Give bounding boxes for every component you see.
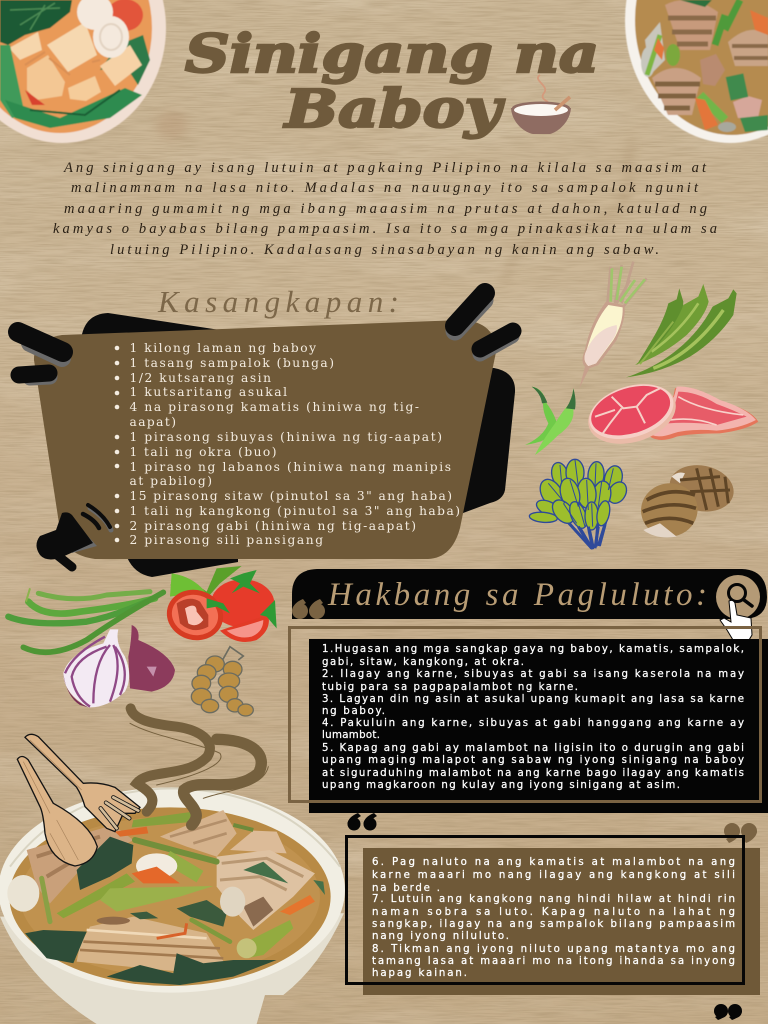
ingredient list: 2 pirasong gabi (hiniwa ng tig-aapat) (130, 519, 416, 533)
panel: ingredients (34, 313, 515, 577)
icon: opening quote brown (292, 599, 325, 619)
icon: kangkong leaves (529, 459, 630, 549)
icon: opening quote black (348, 813, 377, 830)
ingredient list: 1 tali ng okra (buo) (130, 445, 276, 459)
icon: chili peppers (525, 387, 576, 455)
intro paragraph (53, 160, 717, 258)
panel: steps 6 to 8: 7. Lutuin ang kangkong nang hindi hilaw at hindi rin (372, 894, 735, 905)
panel: steps 6 to 8: na berde . (372, 883, 440, 894)
panel: steps 6 to 8: karne maaari mo nang ilagay ang kangkong at sili (372, 870, 735, 881)
panel: steps 6 to 8: 6. Pag naluto na ang kamatis at malambot na ang (372, 857, 735, 868)
title: Baboy (283, 79, 506, 140)
ingredient list: 1 kilong laman ng baboy (130, 341, 316, 355)
ingredient list: 1/2 kutsarang asin (130, 371, 271, 385)
icon: closing quote brown (724, 823, 757, 843)
ingredient list: 1 piraso ng labanos (hiniwa nang manipis (130, 460, 451, 474)
panel: steps 6 to 8: naman sobra sa luto. Kapag naluto na lahat ng (372, 907, 735, 918)
panel: steps 1 to 5: gabi, sitaw, kangkong, at okra. (322, 657, 524, 668)
heading bar: Hakbang sa Pagluluto (292, 569, 767, 619)
intro paragraph: maaaring gumamit ng mga ibang maaasim na prutas at dahon, katulad ng (64, 201, 707, 217)
panel: steps 1 to 5: 5. Kapag ang gabi ay malambot na ligisin ito o durugin ang gabi (322, 743, 744, 754)
icon: gabi taro (637, 459, 738, 541)
pork belly pieces (27, 810, 315, 972)
ingredient list: 4 na pirasong kamatis (hiniwa ng tig- (130, 400, 419, 414)
icon: wooden fork and spoon (17, 734, 140, 866)
panel: steps 1 to 5: 3. Lagyan din ng asin at asukal upang kumapit ang lasa sa karne (322, 694, 744, 705)
kangkong and vegetables (7, 812, 325, 985)
panel: steps 1 to 5 (290, 628, 768, 813)
title (185, 24, 599, 140)
panel: steps 6 to 8: 8. Tikman ang iyong niluto upang matantya mo ang (372, 944, 735, 955)
ingredient list: 1 tasang sampalok (bunga) (130, 356, 334, 370)
ingredient list: 15 pirasong sitaw (pinutol sa 3" ang haba) (130, 489, 452, 503)
icon: closing quote black (714, 1004, 742, 1020)
heading bar: Hakbang sa Pagluluto: Hakbang sa Pagluluto: (327, 577, 707, 613)
panel: steps 1 to 5: at siguraduhing malambot na ang karne bago ilagay ang kamatis (322, 768, 744, 779)
intro paragraph: malinamnam na lasa nito. Madalas na nauugnay ito sa sampalok ngunit (71, 180, 699, 196)
icon: tape strips (18, 293, 513, 378)
ingredient list: 1 pirasong sibuyas (hiniwa ng tig-aapat) (130, 430, 442, 444)
intro paragraph: lutuing Pilipino. Kadalasang sinasabayan ng kanin ang sabaw. (110, 242, 659, 258)
ingredient list: at pabilog) (130, 474, 212, 488)
plate: top right sinigang (625, 0, 768, 143)
panel: steps 6 to 8: hapag kainan. (372, 968, 467, 979)
ingredient list: aapat) (130, 415, 176, 429)
icon: pork slices (581, 374, 758, 454)
panel: steps 6 to 8: nang iyong niluluto. (372, 931, 509, 942)
panel: steps 1 to 5: upang maging malapot ang sabaw ng iyong sinigang na baboy (322, 755, 744, 766)
panel: steps 1 to 5: upang magkaroon ng kulay ang iyong sinigang at asim. (322, 780, 680, 791)
icon: okra (626, 284, 737, 377)
icon: megaphone (36, 505, 111, 567)
ingredient list: 1 kutsaritang asukal (130, 385, 287, 399)
intro paragraph: kamyas o bayabas bilang pampaasim. Isa ito sa mga pinakasikat na ulam sa (53, 221, 717, 237)
illustration: bowl of sinigang (0, 787, 345, 1024)
title: Sinigang na (185, 24, 599, 85)
icon: labanos radish (579, 262, 647, 388)
panel: steps 1 to 5: lumambot. (322, 730, 380, 741)
icon: sampalok tamarind (191, 647, 253, 716)
panel: steps 6 to 8: sangkap, ilagay na ang sampalok bilang pampaasim (372, 919, 735, 930)
panel: steps 1 to 5: 1.Hugasan ang mga sangkap gaya ng baboy, kamatis, sampalok, (322, 644, 744, 655)
steam (130, 708, 268, 825)
ingredient list: 1 tali ng kangkong (pinutol sa 3" ang haba) (130, 504, 460, 518)
icon: kamatis tomatoes (161, 566, 277, 646)
icon: soup bowl (511, 75, 571, 134)
panel: steps 1 to 5: ng baboy. (322, 706, 385, 717)
panel: steps 6 to 8 (346, 836, 760, 995)
plate: top left sinigang (0, 0, 166, 143)
panel: steps 1 to 5: 2. Ilagay ang karne, sibuyas at gabi sa isang kaserola na may (322, 669, 744, 680)
icon: sitaw green beans (8, 588, 163, 652)
panel: steps 1 to 5: tubig para sa pagpapalambot ng karne. (322, 682, 578, 693)
icon: sibuyas onions (63, 625, 175, 707)
heading: Kasangkapan: Kasangkapan: (157, 284, 399, 319)
intro paragraph: Ang sinigang ay isang lutuin at pagkaing Pilipino na kilala sa maasim at (63, 160, 707, 176)
icon: magnifier with cursor (716, 575, 760, 640)
ingredient list (115, 341, 460, 547)
ingredient list: 2 pirasong sili pansigang (130, 533, 323, 547)
panel: steps 6 to 8: tamang lasa at maaari mo na itong ihanda sa inyong (372, 956, 735, 967)
panel: steps 1 to 5: 4. Pakuluin ang karne, sibuyas at gabi hanggang ang karne ay (322, 718, 744, 729)
